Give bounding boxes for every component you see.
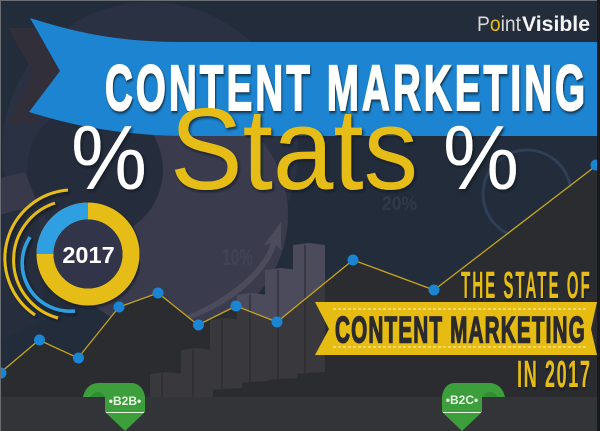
subtitle: the state of: THE STATE OF — [461, 265, 590, 307]
ribbon text: CONTENT MARKETING — [335, 310, 585, 351]
faint percentage labels: 20% — [382, 194, 417, 215]
tag: B2B: •B2B• — [109, 394, 141, 408]
right percent sign: % — [443, 108, 519, 209]
tag: B2C: •B2C• — [446, 393, 478, 407]
logo: PointVisible: Visible — [522, 13, 590, 36]
tag: B2B — [83, 383, 145, 431]
blue banner — [29, 18, 597, 136]
left percent sign: % — [71, 108, 147, 209]
tag: B2C — [442, 383, 505, 431]
right edge strip — [597, 0, 600, 431]
subtitle: in 2017: IN 2017 — [517, 354, 590, 396]
yellow ribbon — [315, 302, 597, 355]
faint percentage labels: 10% — [222, 244, 253, 270]
bottom band — [0, 397, 600, 431]
lower dark area under line chart — [0, 165, 600, 431]
decorative arcs around donut — [5, 190, 75, 318]
title: stats: Stats — [170, 84, 418, 214]
growth arrow — [186, 222, 281, 319]
bar chart — [150, 243, 325, 397]
title: content marketing: CONTENT MARKETING — [105, 53, 585, 125]
line chart — [0, 160, 600, 378]
logo: PointVisible: Point — [477, 13, 521, 36]
logo: PointVisible — [477, 13, 590, 36]
donut chart: 2017 — [45, 211, 131, 297]
faint percentage labels — [222, 194, 417, 270]
donut label: 2017 — [62, 242, 115, 268]
